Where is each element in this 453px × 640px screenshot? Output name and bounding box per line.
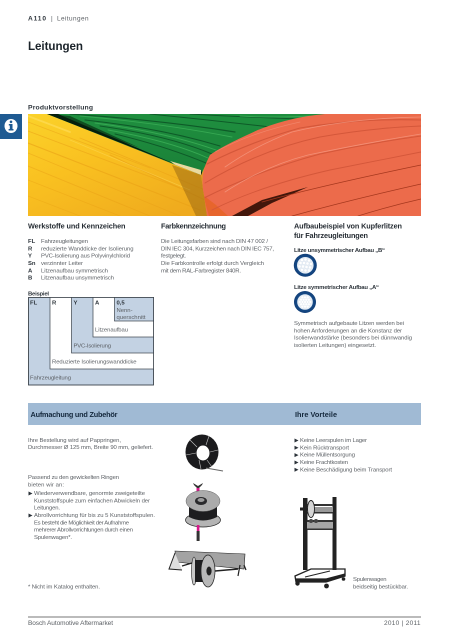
- legend keys: R: [28, 246, 33, 252]
- bullet list: Ihre Vorteile: Keine Leerspulen im Lager: [300, 438, 367, 444]
- body text: Die Farbkontrolle erfolgt durch Vergleich: [161, 261, 264, 267]
- legend keys: verzinnter Leiter: [41, 261, 83, 267]
- bullet list: Ihre Vorteile: Kein Rücktransport: [300, 445, 349, 451]
- icon: spool trolley: [295, 497, 345, 588]
- legend keys: Litzenaufbau symmetrisch: [41, 268, 108, 274]
- heading: Aufbaubeispiel von Kupferlitzen: [294, 222, 402, 230]
- text block: Lieferform: Durchmesser Ø 125 mm, Breite 90 mm, geliefert.: [28, 445, 153, 451]
- page header: A110 Leitungen: [28, 16, 89, 22]
- body text: mit dem RAL-Farbregister 840R.: [161, 268, 241, 274]
- legend keys: Sn: [28, 261, 36, 267]
- label: Beispiel: Beispiel: [28, 292, 49, 298]
- section bar: Aufmachung und Zubehör / Ihre Vorteile: [28, 403, 421, 425]
- text block: Zubehör list: Kunststoffspule zum einfachen Abwickeln der: [34, 498, 150, 504]
- example type-code diagram: querschnitt: [116, 315, 146, 321]
- text block: Zubehör list: bieten wir an:: [28, 482, 64, 488]
- text block: Zubehör list: [28, 475, 155, 541]
- legend keys: Fahrzeugleitungen: [41, 239, 88, 245]
- heading: Farbkennzeichnung: [161, 222, 226, 230]
- panel: Werkstoffe und Kennzeichen: [28, 222, 154, 385]
- footnote: * Nicht im Katalog enthalten.: [28, 584, 100, 590]
- text block: Zubehör list: Spulenwagen*.: [34, 535, 72, 541]
- example type-code diagram: Reduzierte Isolierungswanddicke: [52, 360, 137, 366]
- panel: Farbkennzeichnung: [161, 222, 274, 274]
- title: Leitungen: [28, 40, 83, 53]
- page header: A110 Leitungen: Leitungen: [57, 16, 89, 22]
- legend keys: A: [28, 268, 33, 274]
- example type-code diagram: PVC-Isolierung: [74, 344, 111, 350]
- text block: Lieferform: Ihre Bestellung wird auf Pappringen,: [28, 438, 121, 444]
- body text: Isolierwandstärke (besonders bei dünnwandig: [294, 336, 412, 342]
- heading: Produktvorstellung: Produktvorstellung: [28, 104, 93, 112]
- footer: 2010 | 2011: [384, 620, 421, 627]
- footer: Bosch Automotive Aftermarket: [28, 620, 113, 627]
- example type-code diagram: 0,5: [116, 300, 125, 306]
- body text: isolierten Leitungen) eingesetzt.: [294, 343, 376, 349]
- text block: Zubehör list: Es besteht die Möglichkeit der Aufnahme: [34, 520, 130, 526]
- example type-code diagram: Nenn-: [116, 308, 133, 314]
- example type-code diagram: [28, 298, 154, 385]
- section bar: Aufmachung und Zubehör / Ihre Vorteile: Ihre Vorteile: [295, 410, 337, 419]
- caption: Spulenwagen: Spulenwagen: [353, 577, 386, 583]
- bullet list: Ihre Vorteile: Keine Frachtkosten: [300, 460, 348, 466]
- legend keys: [28, 239, 134, 282]
- bullet list: Ihre Vorteile: Keine Beschädigung beim Transport: [300, 467, 392, 473]
- example type-code diagram: R: [52, 300, 57, 306]
- body text: [161, 239, 274, 274]
- yellow cables: [28, 114, 213, 216]
- example type-code diagram: A: [95, 300, 100, 306]
- heading: für Fahrzeugleitungen: [294, 231, 368, 240]
- caption: Spulenwagen: beidseitig bestückbar.: [353, 584, 408, 590]
- icon: unwinding rack with spool: [169, 551, 246, 587]
- product photo: coloured cables: [28, 114, 425, 216]
- legend keys: B: [28, 276, 32, 282]
- label: Litze B: Litze unsymmetrischer Aufbau „B“: [294, 248, 385, 254]
- body text: Symmetrisch aufgebaute Litzen werden bei: [294, 321, 404, 327]
- text block: Lieferform: [28, 438, 153, 451]
- body text: DIN IEC 304, Kurzzeichen nach DIN IEC 757,: [161, 246, 274, 252]
- text block: Zubehör list: Wiederverwendbare, genormte zweigeteilte: [34, 491, 146, 497]
- example type-code diagram: FL: [30, 300, 38, 306]
- icon: plastic spool with wing nut: [186, 483, 220, 541]
- body text: [294, 321, 412, 349]
- heading: Werkstoffe und Kennzeichen: [28, 222, 126, 230]
- icon: asymmetric strand cross-section: [294, 254, 317, 277]
- icon: symmetric strand cross-section: [294, 291, 316, 313]
- body text: hohen Anforderungen an die Konstanz der: [294, 328, 402, 334]
- body text: festgelegt.: [161, 254, 186, 260]
- section bar: Aufmachung und Zubehör / Ihre Vorteile: Aufmachung und Zubehör: [30, 410, 118, 419]
- legend keys: Litzenaufbau unsymmetrisch: [41, 276, 114, 282]
- page header: A110 Leitungen: |: [51, 16, 53, 22]
- legend keys: Y: [28, 254, 32, 260]
- caption: Spulenwagen: [353, 577, 408, 590]
- icon: info tab: [0, 114, 22, 139]
- green cables: [47, 114, 332, 176]
- text block: Zubehör list: mehrerer Abrollvorrichtungen durch einen: [34, 528, 133, 534]
- bullet list: Ihre Vorteile: [294, 438, 392, 473]
- example type-code diagram: Fahrzeugleitung: [30, 376, 71, 382]
- label: Litze A: Litze symmetrischer Aufbau „A“: [294, 285, 379, 291]
- legend keys: PVC-Isolierung aus Polyvinylchlorid: [41, 254, 130, 260]
- text block: Zubehör list: Passend zu den gewickelten Ringen: [28, 475, 119, 481]
- text block: Zubehör list: Abrollvorrichtung für bis zu 5 Kunststoffspulen.: [34, 513, 155, 519]
- panel: Aufbaubeispiel von Kupferlitzen: [294, 222, 412, 349]
- example type-code diagram: Litzenaufbau: [95, 328, 128, 334]
- heading: [294, 222, 402, 240]
- text block: Zubehör list: Leitungen.: [34, 506, 60, 512]
- icon: wire coil: [186, 434, 223, 471]
- legend keys: FL: [28, 239, 36, 245]
- orange cables: [190, 114, 425, 216]
- bullet list: Ihre Vorteile: Keine Müllentsorgung: [300, 453, 355, 459]
- legend keys: reduzierte Wanddicke der Isolierung: [41, 246, 134, 252]
- body text: Die Leitungsfarben sind nach DIN 47 002 /: [161, 239, 268, 245]
- footer: [28, 616, 421, 627]
- page header: A110 Leitungen: A110: [28, 16, 46, 22]
- example type-code diagram: Y: [74, 300, 78, 306]
